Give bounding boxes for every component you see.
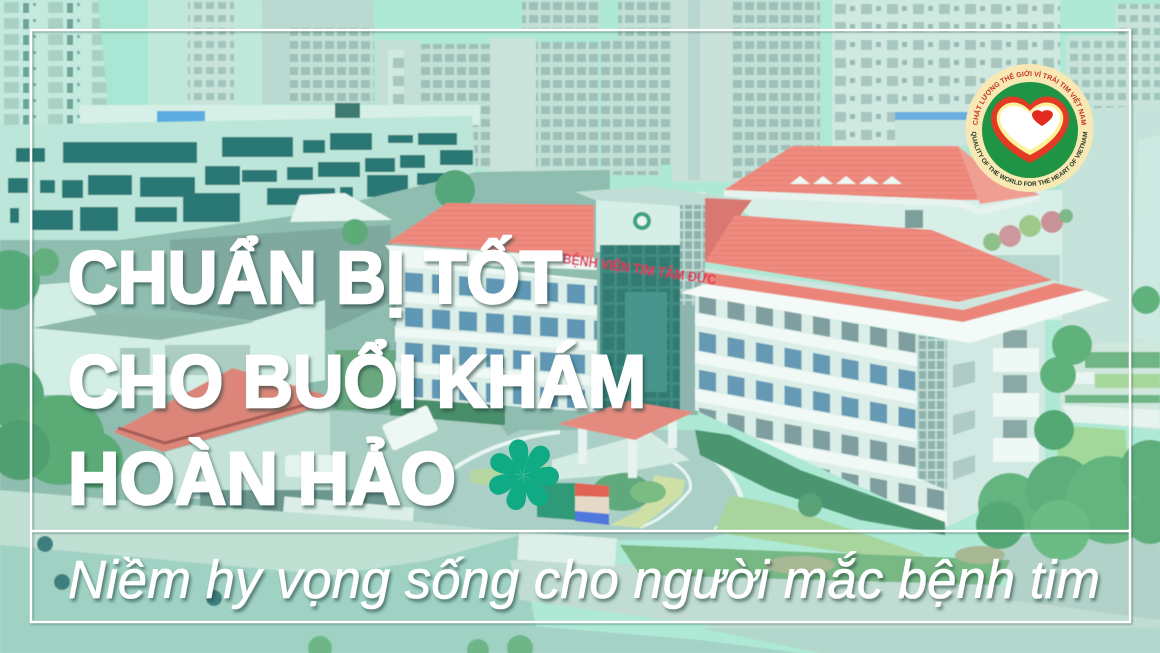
flowering hedge bbox=[620, 545, 1010, 585]
back wing with red roof bbox=[724, 105, 1160, 345]
foreground ground, road and plaza bbox=[0, 490, 1160, 653]
left hospital block with dark facade bbox=[0, 116, 476, 240]
residential towers bbox=[0, 0, 1160, 182]
driveway, lawns and canopy bbox=[440, 401, 745, 540]
icon: green flower asterisk bbox=[480, 433, 566, 517]
right wing roof bbox=[680, 215, 1110, 343]
white service building bbox=[33, 282, 325, 395]
balcony flowers bbox=[983, 209, 1073, 251]
right-side trees, ramps and lawn bbox=[1034, 286, 1160, 480]
left and hedge trees bbox=[0, 248, 505, 488]
billboard bbox=[537, 483, 609, 525]
central tower with glass front bbox=[575, 186, 752, 415]
motorbikes bbox=[37, 536, 222, 606]
left wing bbox=[385, 203, 597, 412]
right wing facade bbox=[695, 295, 1045, 527]
foreground trees bbox=[308, 440, 1160, 653]
red-roof pavilion bbox=[113, 368, 343, 500]
main hospital building bbox=[385, 186, 1110, 527]
sky bbox=[0, 0, 1160, 320]
heading line 3: HOÀN HẢO bbox=[68, 437, 456, 520]
mid-left ground and service wing bbox=[0, 170, 610, 560]
logo badge bbox=[966, 64, 1094, 192]
logo text bottom: QUALITY OF THE WORLD FOR THE HEART OF VIETNAM bbox=[970, 132, 1088, 186]
logo text top: CHẤT LƯỢNG THẾ GIỚI VÌ TRÁI TIM VIỆT NAM bbox=[972, 70, 1086, 125]
heading bbox=[68, 236, 646, 520]
heart layers bbox=[991, 97, 1069, 163]
heading line 2: CHO BUỔI KHÁM bbox=[68, 340, 646, 423]
parking and cars bbox=[200, 405, 600, 560]
hospital sign: BỆNH VIỆN TIM TÂM ĐỨC bbox=[562, 249, 717, 288]
tagline: Niềm hy vọng sống cho người mắc bệnh tim bbox=[68, 550, 1100, 610]
lawn and base hedge bbox=[695, 430, 945, 562]
rooftop plant and blue sign bbox=[80, 103, 480, 125]
heading line 1: CHUẨN BỊ TỐT bbox=[68, 236, 562, 319]
